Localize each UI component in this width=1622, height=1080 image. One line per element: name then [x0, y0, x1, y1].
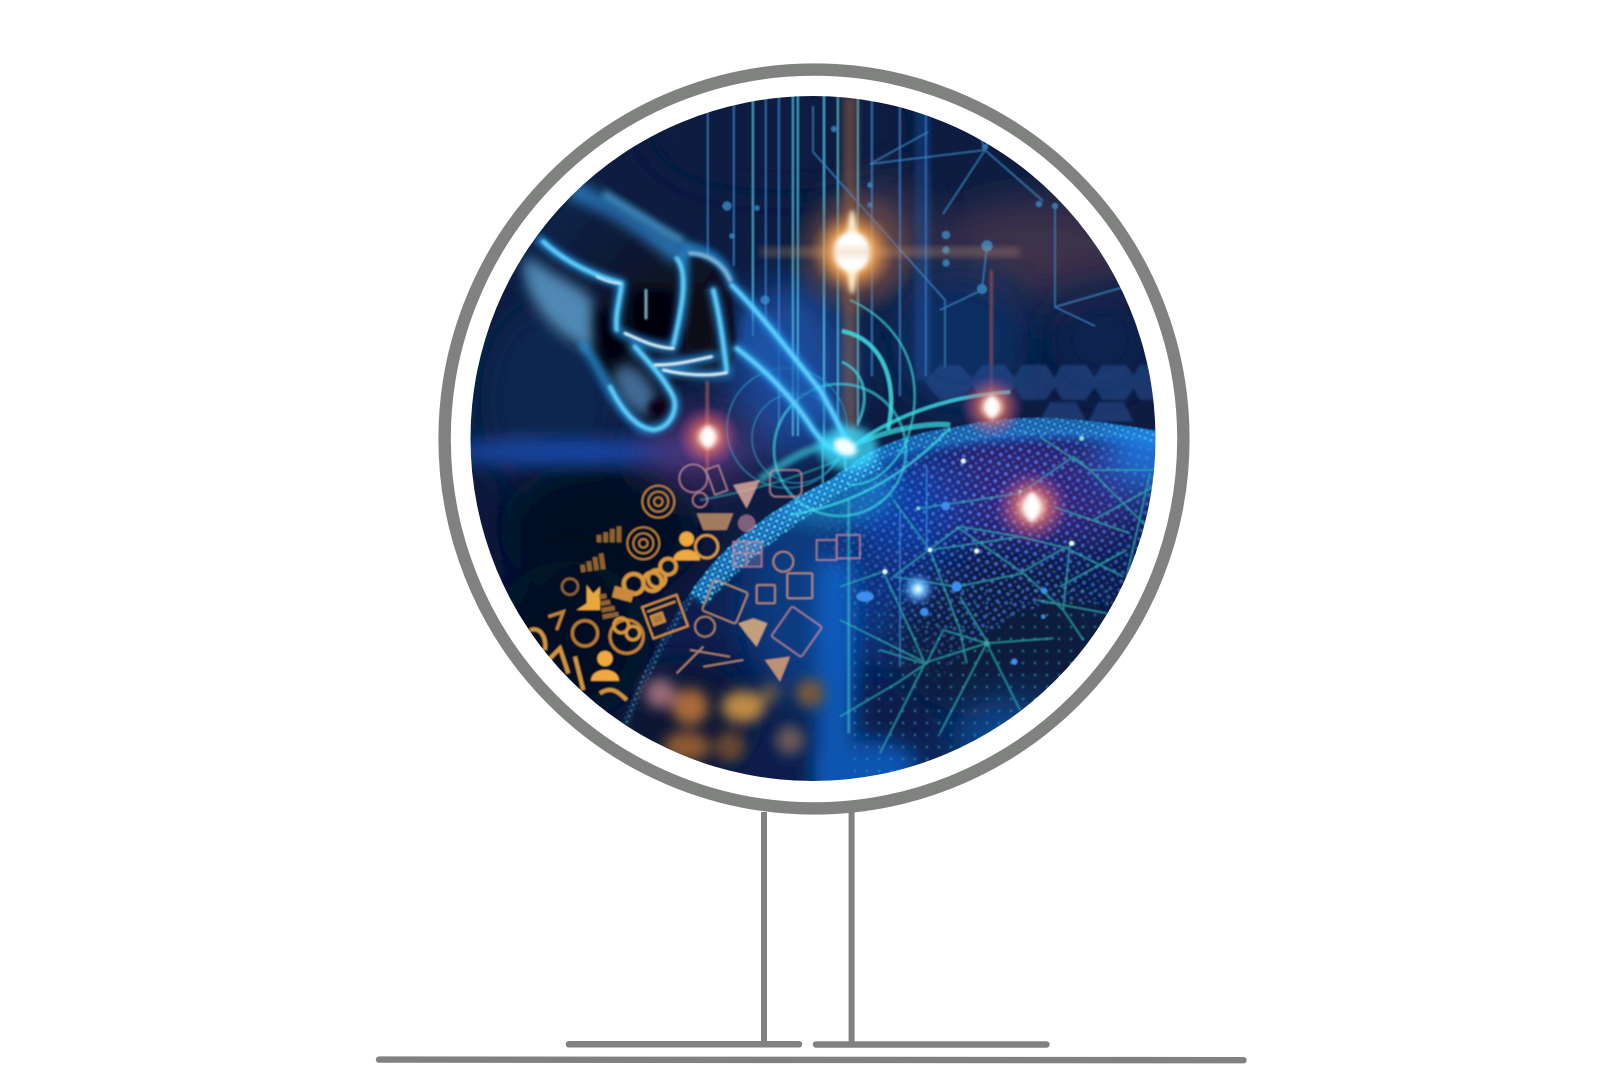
illustration: globe on a stand: [376, 63, 1247, 1064]
hexagon band: [925, 365, 1175, 422]
light flare: globe top: [960, 375, 1024, 439]
pointing hand: [523, 177, 852, 453]
stand: left foot: [566, 1041, 802, 1048]
hand shading: [523, 180, 830, 430]
ring frame: [445, 70, 1183, 808]
ground line: [379, 1056, 1244, 1063]
circuit network lines top right: [722, 96, 1127, 368]
circular photo: hand touching digital globe: [470, 96, 1156, 781]
digital globe: [622, 416, 1156, 781]
fingertip glow: [818, 426, 878, 470]
hand glowing outlines: [540, 240, 852, 453]
icons over the globe rim: [677, 464, 860, 682]
stand: right foot: [813, 1041, 1050, 1048]
orange data icons: [530, 464, 860, 762]
light flare: top: [760, 186, 1020, 318]
light flare: left: [676, 405, 740, 469]
stand: right post: [849, 812, 855, 1047]
concentric touch rings: [700, 300, 1010, 516]
stand: left post: [761, 812, 767, 1047]
network lines on globe: [840, 436, 1160, 753]
vertical data lines: [704, 96, 996, 484]
light flare: globe right: [994, 469, 1070, 545]
photo background: [470, 96, 1156, 724]
blurred foreground icons: [645, 678, 824, 762]
light flare: blue: [901, 572, 935, 606]
